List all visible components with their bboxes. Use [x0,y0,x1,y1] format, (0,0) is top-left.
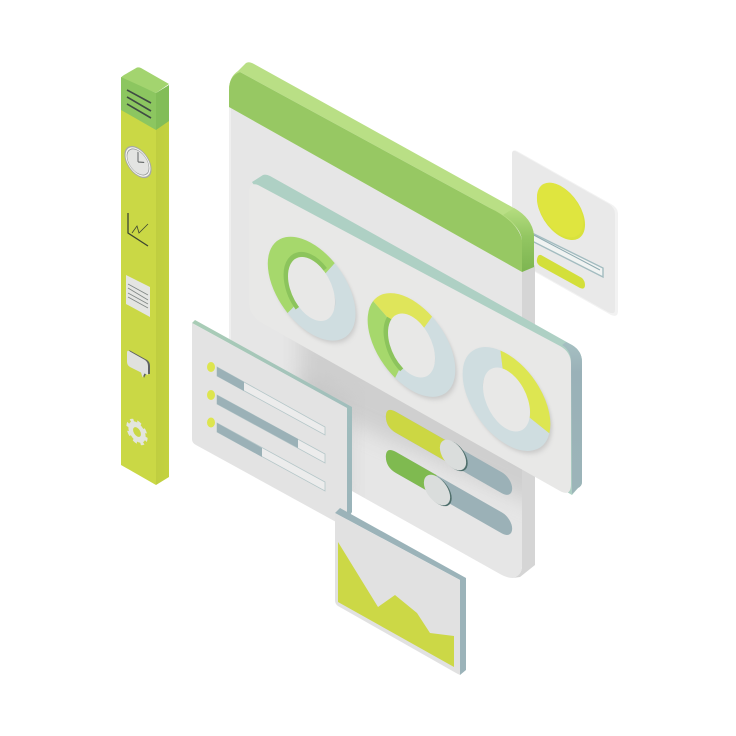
progress bar 2 [217,395,325,463]
window body [229,107,535,578]
icon: clock [125,141,151,183]
progress bar 1 [217,367,325,435]
slider 2 [386,446,512,539]
panel: list card [192,320,352,528]
area chart [338,542,454,667]
icon: menu [127,90,151,118]
window header bar [229,62,534,272]
donut 2 [370,278,457,418]
slider 2 knob [424,469,452,512]
panel: area chart card [335,508,466,675]
icon: document [126,275,150,317]
panel: main window [229,62,535,578]
panel: profile card [512,150,618,316]
yellow pill [537,255,585,289]
donut 3 [465,332,552,472]
panel: donut charts card [249,175,582,495]
donut 1 [270,222,357,361]
icon: speech bubble [127,350,150,378]
outline bar [528,231,603,277]
list bullets [207,362,215,428]
panel: sidebar [121,67,169,485]
slider 1 [386,406,512,499]
sidebar head block [121,67,169,130]
slider 1 knob [440,434,468,477]
sidebar body [121,108,169,485]
avatar circle [537,173,585,250]
isometric dashboard illustration [121,62,618,675]
progress bar 3 [217,423,325,491]
icon: gear [128,417,146,447]
icon: line chart [128,213,148,246]
